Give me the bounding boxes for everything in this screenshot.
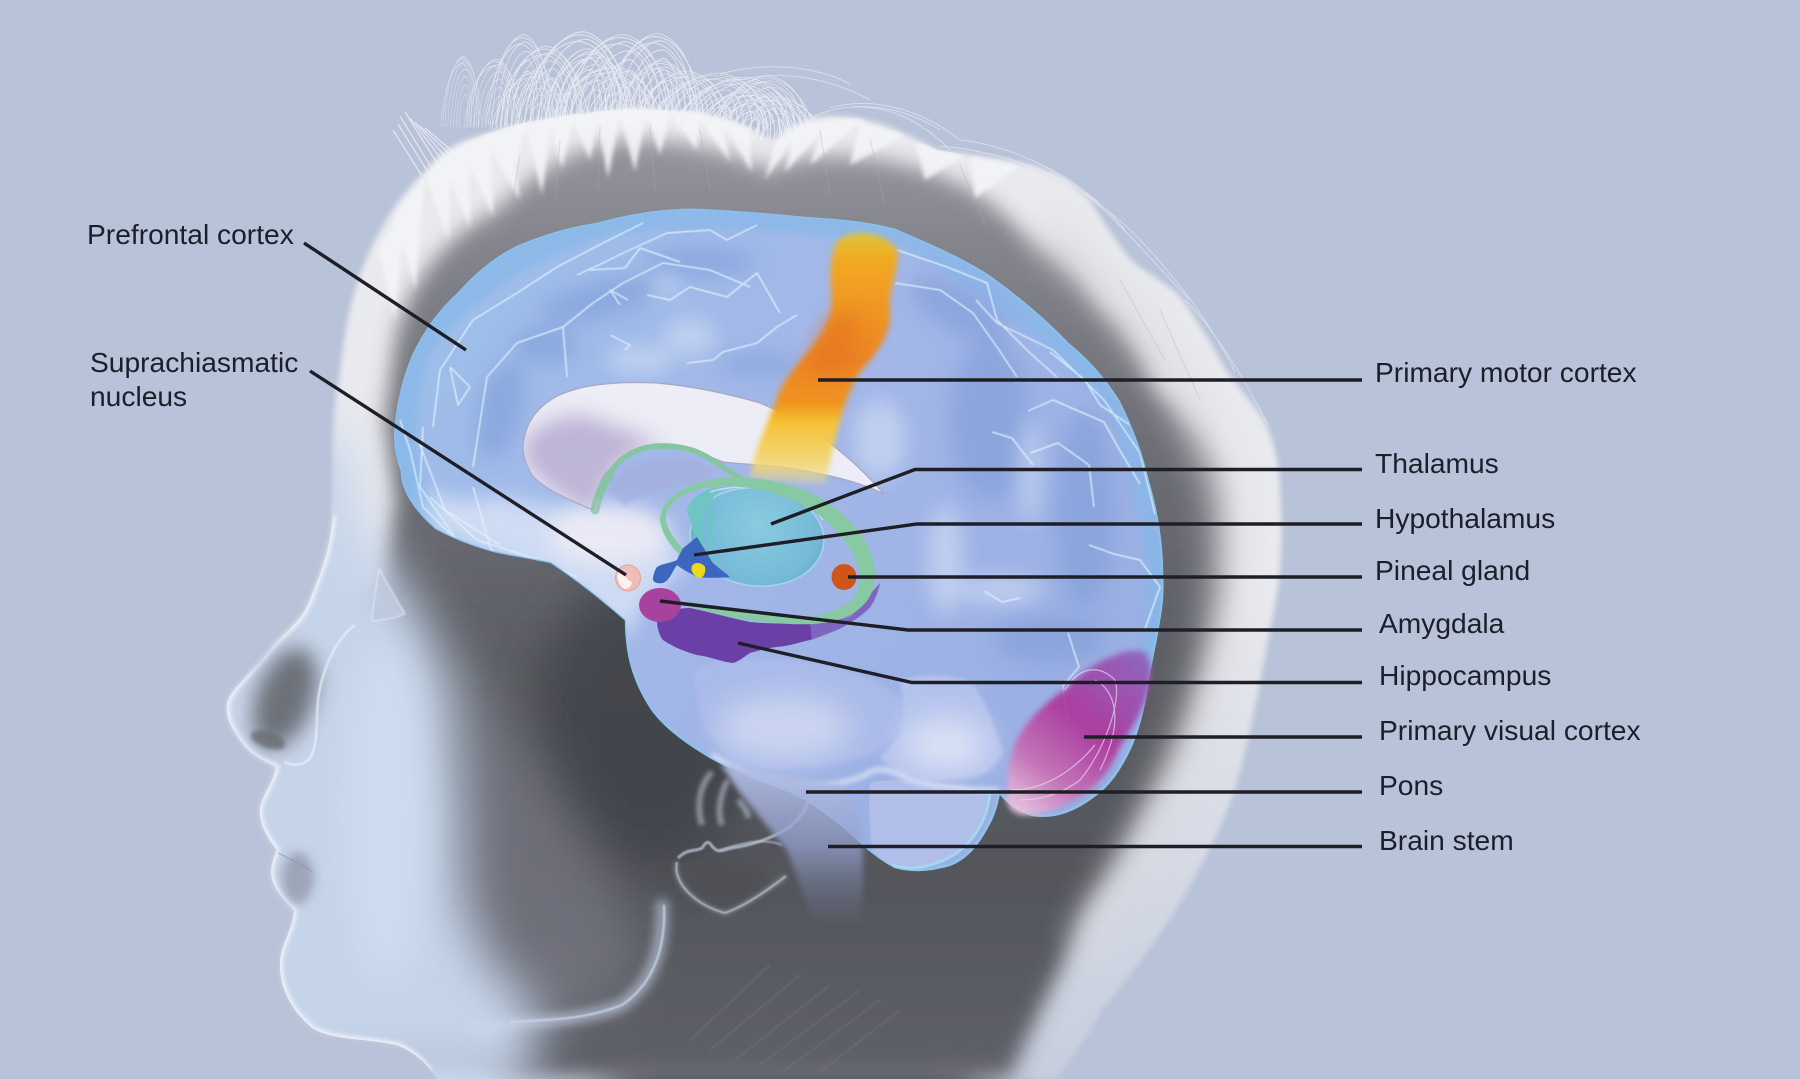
cortex shell band [403, 215, 1159, 690]
neck hair streaks [690, 965, 900, 1072]
eye socket [372, 569, 405, 621]
label: hippocampus: Hippocampus [1379, 659, 1551, 691]
thalamus [685, 481, 829, 593]
brain [395, 210, 1162, 870]
region under callosum arc [612, 460, 709, 505]
hippocampus translucent tail [810, 583, 880, 640]
lip shadow [282, 852, 314, 904]
primary motor cortex [750, 233, 897, 485]
nostril [248, 729, 287, 752]
cerebellum [869, 780, 990, 868]
hypothalamus [653, 537, 730, 583]
yellow nucleus [691, 563, 705, 578]
label: suprachiasmatic nucleus: nucleus [90, 380, 187, 412]
label: prefrontal cortex [87, 218, 466, 350]
label: pineal gland: Pineal gland [1375, 554, 1530, 586]
hippocampus [657, 583, 880, 663]
bottom edge fill for head interior [584, 1064, 1008, 1079]
pineal gland [832, 564, 856, 590]
label: pons: Pons [1379, 769, 1443, 801]
label: thalamus: Thalamus [1375, 447, 1499, 479]
primary visual cortex [1007, 651, 1151, 815]
mid-tone jaw region [456, 674, 646, 1014]
label: hypothalamus [694, 502, 1555, 555]
frontal lower pale band [425, 490, 690, 640]
amygdala [639, 588, 681, 622]
corpus callosum arc [523, 383, 884, 510]
temporal lobe highlight [717, 696, 853, 760]
label: brain stem: Brain stem [1379, 824, 1514, 856]
label: amygdala [660, 601, 1505, 639]
hair fine grey streaks [510, 125, 1200, 400]
sulci shadow blobs [467, 248, 1113, 662]
nose wing crease [284, 625, 355, 765]
label: prefrontal cortex: Prefrontal cortex [87, 218, 294, 250]
temporal lobe [693, 659, 902, 769]
light gyri blobs [606, 276, 1045, 615]
label: amygdala: Amygdala [1379, 607, 1505, 639]
brain stem [720, 763, 863, 925]
green fornix loop [660, 478, 875, 624]
face glow bottom edge [421, 1052, 527, 1079]
hair strands on crown [393, 32, 1268, 425]
dark cheek shadow [535, 570, 765, 870]
face glow [210, 400, 540, 1079]
mouth line [278, 853, 312, 872]
callosum lavender shading [520, 415, 665, 515]
cheek highlight [364, 672, 414, 938]
ear [676, 772, 808, 913]
pons arc highlight [712, 755, 1000, 790]
occipital lobe highlight [901, 718, 989, 772]
upper green fornix arc [595, 446, 745, 510]
pale region under callosum [548, 505, 672, 565]
label: primary visual cortex: Primary visual cortex [1379, 714, 1641, 746]
label: thalamus [771, 447, 1499, 524]
suprachiasmatic nucleus [616, 565, 640, 591]
visual cortex gyri [1012, 670, 1117, 800]
nose shading [241, 640, 329, 756]
head silhouette with hair rim [227, 108, 1282, 1079]
face edge highlight [227, 516, 430, 1072]
jawline highlight [470, 900, 664, 1030]
label: hippocampus [738, 643, 1551, 691]
label: suprachiasmatic nucleus: Suprachiasmatic [90, 346, 298, 378]
gyri veins [400, 223, 1160, 721]
right rim soft grey-to-white transition [1040, 230, 1226, 950]
label: hypothalamus: Hypothalamus [1375, 502, 1555, 534]
occipital lobe [880, 675, 1003, 781]
hair spikes along crown [378, 108, 1020, 320]
cerebellum rim [873, 793, 990, 868]
head interior shading [210, 108, 1226, 1079]
label: primary motor cortex: Primary motor cortex [1375, 356, 1637, 388]
label: suprachiasmatic nucleus [90, 346, 626, 575]
